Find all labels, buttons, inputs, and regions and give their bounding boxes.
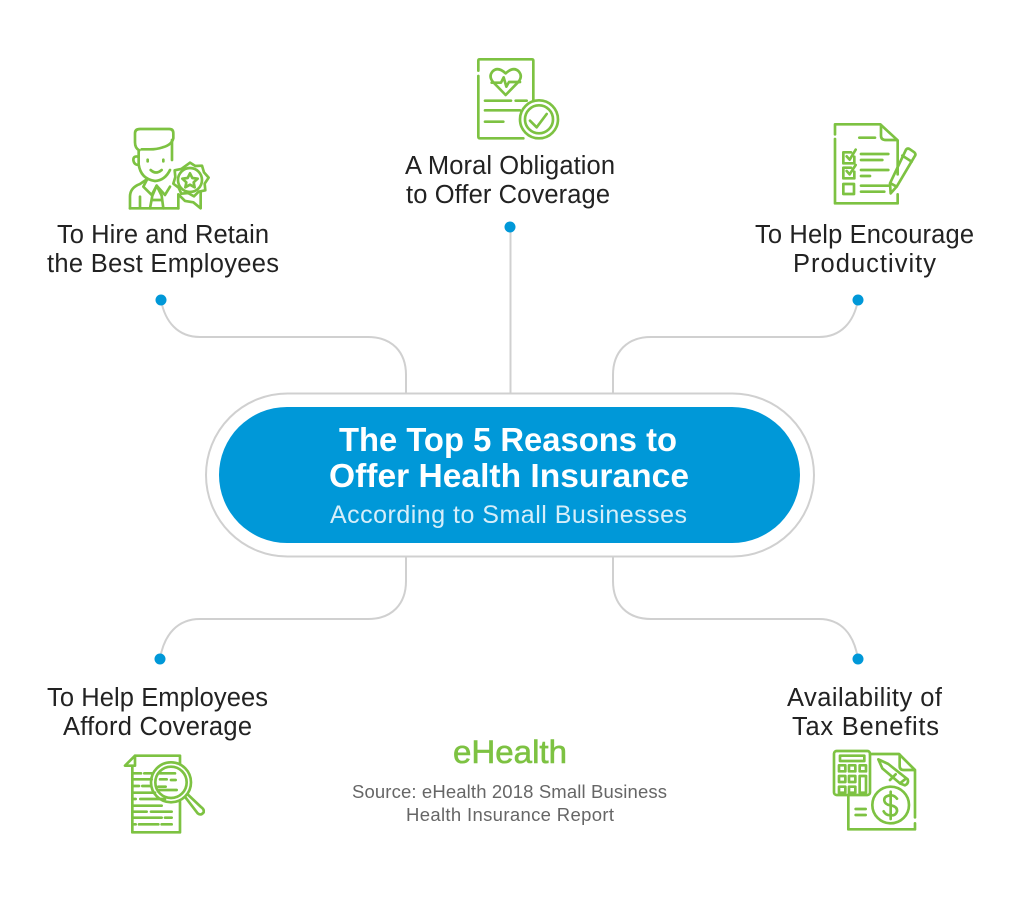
icon: medical document with check — [478, 59, 558, 138]
source note: Health Insurance Report — [406, 804, 614, 825]
label: tax benefits: Availability of — [787, 684, 943, 712]
label: hire and retain: the Best Employees — [47, 250, 279, 278]
label: moral obligation: to Offer Coverage — [406, 181, 610, 209]
icon: checklist with pencil — [835, 124, 915, 203]
connector: top centre — [504, 222, 516, 393]
subtitle: According to Small Businesses — [330, 501, 687, 529]
connector: top right — [613, 294, 864, 393]
central pill — [206, 394, 814, 556]
icon: calculator and tax document — [834, 751, 915, 829]
icon: employee with award badge — [130, 129, 209, 208]
source note — [352, 781, 667, 825]
connector: top left — [156, 294, 406, 393]
label: productivity: To Help Encourage — [755, 221, 974, 249]
label: tax benefits — [787, 684, 943, 741]
label: hire and retain: To Hire and Retain — [57, 221, 269, 249]
label: moral obligation — [405, 152, 615, 209]
title: The Top 5 Reasons to — [339, 421, 677, 458]
logo: eHealth: eHealth — [453, 734, 567, 770]
connector: bottom left — [154, 557, 406, 664]
title — [329, 421, 689, 494]
label: hire and retain — [47, 221, 279, 278]
source note: Source: eHealth 2018 Small Business — [352, 781, 667, 802]
label: productivity — [755, 221, 974, 278]
title: Offer Health Insurance — [329, 457, 689, 494]
icon: document with magnifier — [125, 756, 204, 832]
connector: bottom right — [613, 557, 864, 664]
label: tax benefits: Tax Benefits — [792, 713, 939, 741]
label: moral obligation: A Moral Obligation — [405, 152, 615, 180]
label: afford coverage — [47, 684, 268, 741]
label: afford coverage: Afford Coverage — [63, 713, 252, 741]
label: productivity: Productivity — [793, 250, 936, 278]
label: afford coverage: To Help Employees — [47, 684, 268, 712]
